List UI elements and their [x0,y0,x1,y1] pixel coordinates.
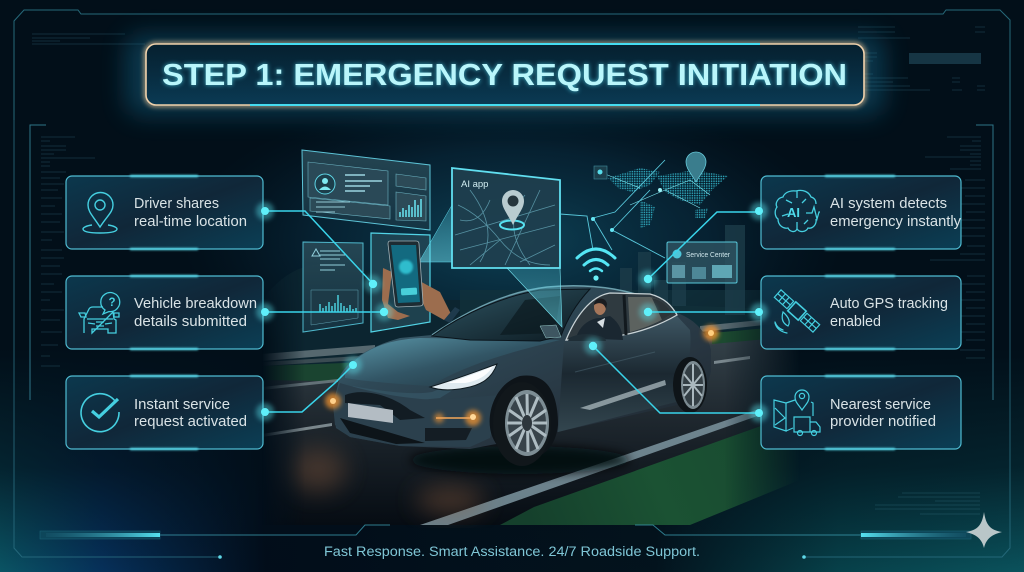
icon: check circle [81,394,119,432]
card: nearest service provider [750,376,961,449]
icon: map pin over globe [686,152,706,182]
card text: real-time location [134,214,247,230]
icon: wifi signal [577,249,615,281]
icon: AI brain [775,190,820,232]
card: AI detects emergency [750,176,962,249]
connector lines and nodes [265,211,765,413]
hologram panel: service center [667,242,737,283]
icon: car with question bubble [79,293,120,333]
card text: Vehicle breakdown [134,296,257,312]
footer tagline: Fast Response. Smart Assistance. 24/7 Roadside Support. [324,544,700,559]
icon: location pin [83,192,117,233]
hologram panel: driver dashboard [302,150,430,230]
hood [345,338,560,386]
hologram panel: AI app map: AI app [461,179,488,190]
card text: AI system detects [830,196,947,212]
city skyline [620,225,745,315]
card text: Auto GPS tracking [830,296,948,312]
card text: emergency instantly [830,214,962,230]
driver [568,298,623,341]
night landscape with road and grass [262,265,800,525]
rear wheel [673,357,707,413]
front wheel [490,375,558,466]
windshield [432,289,590,341]
phone [388,241,423,307]
amber lights [325,325,719,426]
title banner [125,34,885,116]
hand holding phone [382,241,460,323]
card text: Nearest service [830,397,931,413]
hologram panel: AI app map [452,168,560,268]
world map network [560,152,728,258]
card: auto GPS tracking [750,276,961,349]
side windows [566,293,677,340]
side mirror [540,325,561,338]
icon: AI brain: AI [787,205,800,220]
card text: Driver shares [134,196,219,212]
hologram beam: map to car mirror [507,268,562,327]
card text: Instant service [134,397,230,413]
car [325,286,719,466]
side door panels [558,316,690,432]
icon: satellite [774,289,820,333]
footer progress bar left [40,531,160,539]
icon: car with question bubble: ? [108,297,116,309]
hologram panel: service center: Service Center [686,250,731,259]
title text: STEP 1: EMERGENCY REQUEST INITIATION [162,57,847,92]
hologram beam: phone to map [419,205,452,262]
card text: enabled [830,314,881,330]
frame end dots [218,555,806,559]
front bumper and grille [333,383,500,447]
card: instant service request [66,376,274,449]
icon: sparkle star [966,512,1002,548]
footer progress bar right [861,531,971,539]
icon: map and delivery truck [774,390,820,436]
card: driver shares location [66,176,274,249]
headlight [430,364,497,390]
hologram panel: alerts and bar chart [303,242,363,332]
licence plate [348,403,393,423]
hologram panel: phone backing [371,233,430,332]
card: vehicle breakdown [66,276,274,349]
card text: provider notified [830,414,936,430]
card text: details submitted [134,314,247,330]
car body [333,286,711,449]
card text: request activated [134,414,247,430]
decorative data readouts [32,27,985,514]
roof highlight [432,286,677,335]
title banner: STEP 1: EMERGENCY REQUEST INITIATION [162,57,847,92]
